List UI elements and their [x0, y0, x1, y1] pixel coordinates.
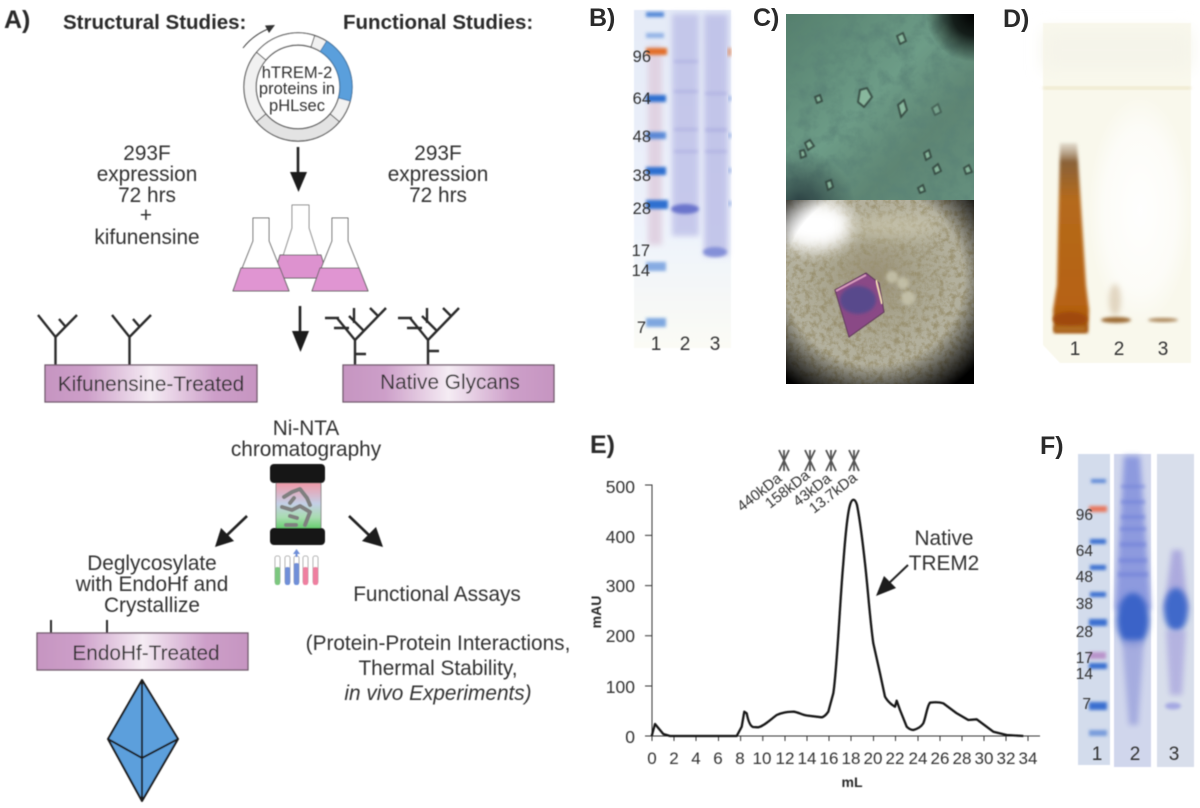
arrow: plasmid to flasks: [290, 147, 307, 192]
y axis: 500: [606, 477, 635, 497]
x axis: 18: [842, 749, 860, 768]
x axis: 26: [931, 749, 949, 768]
gel lane numbers: [651, 334, 720, 355]
box: EndoHf-treated: EndoHf-Treated: [72, 642, 220, 665]
gel molecular weight labels: 38: [633, 167, 651, 185]
heading: structural studies: Structural Studies:: [63, 11, 246, 34]
panel C label: C): [753, 4, 779, 32]
text: functional assays: Functional Assays: [353, 583, 521, 606]
panel D: silver-stained gel: [1003, 5, 1192, 363]
text: functional assays: (Protein-Protein Interactions,: [306, 632, 570, 655]
panel E label: E): [590, 431, 615, 459]
gel molecular weight labels: 64: [633, 90, 651, 108]
size standard labels: [734, 467, 861, 517]
icon: native complex glycans: [325, 308, 459, 365]
icon: crystal: [108, 680, 178, 801]
x axis: 10: [753, 749, 771, 768]
heading: functional studies: Functional Studies:: [343, 11, 533, 34]
text: right expression conditions: [388, 142, 488, 207]
y axis: 300: [606, 576, 635, 596]
icon: kifunensine-treated glycans: [38, 315, 151, 365]
icon: glycan stubs: [51, 620, 107, 633]
gel molecular weight labels: [1076, 507, 1093, 713]
gel lane numbers: 1: [1092, 744, 1102, 765]
gel molecular weight labels: 48: [1076, 569, 1093, 586]
callout: native TREM2: [876, 527, 979, 596]
plasmid map: proteins in: [259, 80, 335, 98]
panel F: purified protein gel: [1040, 432, 1194, 767]
gel molecular weight labels: 38: [1076, 596, 1093, 613]
text: deglycosylate and crystallize: Deglycosylate: [87, 552, 217, 575]
text: functional assays: [306, 583, 570, 705]
gel molecular weight labels: [632, 48, 651, 337]
text: left expression conditions: kifunensine: [94, 226, 200, 249]
gel lane numbers: 3: [1169, 744, 1179, 765]
panel B: SDS-PAGE gel: [589, 4, 731, 355]
gel molecular weight labels: 7: [1082, 696, 1091, 713]
text: left expression conditions: expression: [97, 163, 197, 186]
icon: eluted fraction tubes: [275, 549, 318, 585]
panel D label: D): [1003, 5, 1029, 33]
size standard labels: 43kDa: [790, 470, 835, 510]
gel image: [1078, 454, 1194, 767]
gel lane numbers: 2: [1114, 339, 1124, 360]
panel C: crystal micrographs: [753, 4, 974, 384]
panel A: expression and purification workflow: [4, 6, 570, 801]
x axis: 28: [953, 749, 971, 768]
x axis: 22: [886, 749, 904, 768]
box: native glycans: [343, 365, 554, 402]
x axis: 16: [820, 749, 838, 768]
gel molecular weight labels: 96: [1076, 507, 1093, 524]
text: Ni-NTA chromatography: [231, 417, 382, 461]
x axis: 14: [798, 749, 816, 768]
y axis: [588, 477, 652, 747]
size standard labels: 13.7kDa: [806, 469, 861, 517]
y axis: 0: [625, 727, 635, 747]
gel molecular weight labels: 96: [633, 48, 651, 66]
size standard labels: 158kDa: [762, 467, 814, 512]
x axis: 4: [691, 749, 701, 768]
text: functional assays: in vivo Experiments): [344, 682, 532, 705]
text: functional assays: Thermal Stability,: [358, 657, 518, 680]
chromatogram trace: [652, 500, 1023, 736]
gel image: [634, 10, 731, 348]
panel B label: B): [589, 4, 615, 32]
gel molecular weight labels: 28: [1076, 624, 1093, 641]
box: kifunensine-treated: Kifunensine-Treated: [58, 373, 244, 396]
gel image: [1043, 23, 1192, 363]
x axis: 20: [864, 749, 882, 768]
icon: chromatography column: [270, 464, 325, 545]
gel lane numbers: 3: [1158, 339, 1168, 360]
gel lane numbers: 1: [1070, 339, 1080, 360]
text: deglycosylate and crystallize: with EndoHf and: [75, 573, 228, 596]
text: left expression conditions: 72 hrs: [118, 184, 176, 207]
x axis: 24: [909, 749, 927, 768]
arrow: flasks to glycoforms: [292, 306, 309, 352]
panel F label: F): [1040, 432, 1064, 460]
text: left expression conditions: [94, 142, 200, 249]
y axis: 400: [606, 527, 635, 547]
panel E: size exclusion chromatogram: [588, 431, 1040, 790]
gel molecular weight labels: 14: [1076, 666, 1093, 683]
plasmid map: hTREM-2: [262, 64, 332, 82]
x axis: 32: [997, 749, 1015, 768]
x axis: 8: [735, 749, 745, 768]
arrow: to functional assays: [349, 516, 383, 547]
gel molecular weight labels: 17: [632, 242, 650, 260]
x axis: 30: [975, 749, 993, 768]
gel molecular weight labels: 14: [632, 262, 650, 280]
text: right expression conditions: expression: [388, 163, 488, 186]
text: left expression conditions: 293F: [123, 142, 171, 165]
plasmid map: [243, 25, 352, 141]
gel molecular weight labels: 48: [633, 128, 651, 146]
panel A label: A): [4, 6, 30, 34]
size standard markers: [779, 450, 859, 471]
gel lane numbers: [1092, 744, 1179, 765]
x axis: 12: [776, 749, 794, 768]
text: deglycosylate and crystallize: Crystallize: [104, 594, 200, 617]
gel lane numbers: [1070, 339, 1168, 360]
x axis: 0: [647, 749, 657, 768]
gel lane numbers: 2: [680, 334, 690, 355]
x axis: 34: [1019, 749, 1037, 768]
plasmid map: pHLsec: [269, 97, 325, 115]
gel lane numbers: 1: [651, 334, 661, 355]
gel molecular weight labels: 7: [637, 319, 646, 337]
y axis: 100: [606, 677, 635, 697]
text: Ni-NTA chromatography: chromatography: [231, 438, 382, 461]
text: deglycosylate and crystallize: [75, 552, 228, 617]
x axis: mL: [842, 774, 863, 790]
micrograph: single large crystal: [777, 199, 974, 384]
text: right expression conditions: 72 hrs: [409, 184, 467, 207]
callout: native TREM2: TREM2: [909, 552, 979, 575]
arrow: to deglycosylation: [215, 516, 247, 547]
icon: culture flasks: [233, 205, 368, 291]
callout: native TREM2: Native: [915, 527, 973, 550]
y axis: 200: [606, 626, 635, 646]
text: Ni-NTA chromatography: Ni-NTA: [273, 417, 339, 440]
gel lane numbers: 2: [1130, 744, 1140, 765]
x axis: 2: [669, 749, 679, 768]
y axis: mAU: [588, 596, 604, 628]
box: native glycans: Native Glycans: [380, 371, 520, 394]
gel molecular weight labels: 17: [1076, 650, 1093, 667]
gel lane numbers: 3: [710, 334, 720, 355]
gel molecular weight labels: 28: [633, 200, 651, 218]
gel molecular weight labels: 64: [1076, 543, 1093, 560]
size standard labels: 440kDa: [734, 470, 786, 515]
box: EndoHf-treated: [37, 633, 248, 670]
x axis: 6: [713, 749, 723, 768]
micrograph: small crystals: [786, 14, 974, 200]
text: right expression conditions: 293F: [414, 142, 462, 165]
text: left expression conditions: +: [140, 204, 152, 227]
x axis: [647, 736, 1040, 790]
box: kifunensine-treated: [45, 365, 257, 402]
